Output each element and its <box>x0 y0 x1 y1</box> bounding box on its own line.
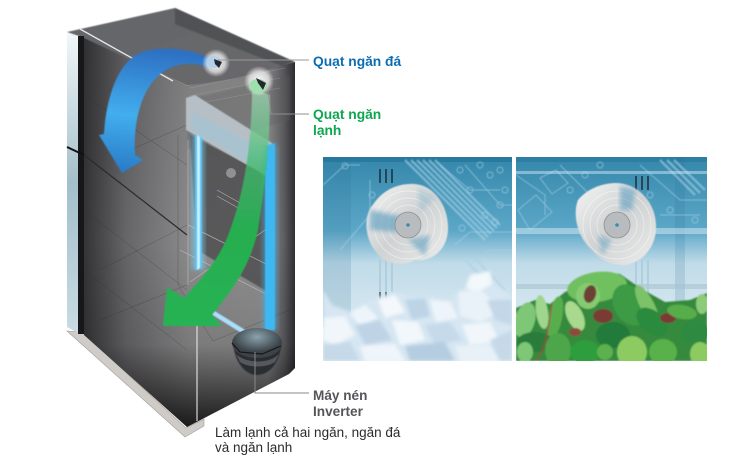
left door edge strip <box>67 33 78 333</box>
panel: fridge compartment fan <box>511 157 710 368</box>
label: inverter compressor: Máy nén <box>313 388 367 403</box>
base plinth <box>67 331 204 437</box>
label: fridge fan: Quạt ngăn <box>313 107 381 122</box>
salad leaves <box>516 270 707 361</box>
door gap and edge highlights <box>67 29 290 421</box>
leader line: ice fan <box>218 59 309 61</box>
compressor <box>232 328 282 375</box>
body <box>84 36 295 427</box>
fan <box>366 184 448 264</box>
green air arrow <box>163 88 270 326</box>
ice fan <box>202 49 230 77</box>
caption: và ngăn lạnh <box>215 440 292 455</box>
ice <box>323 271 512 361</box>
panel: ice compartment fan <box>323 157 512 361</box>
label: fridge fan: lạnh <box>313 123 341 138</box>
refrigerator <box>67 8 295 437</box>
leader line: fridge fan <box>268 90 309 114</box>
glass shelves <box>516 171 707 174</box>
wires <box>380 169 392 305</box>
fan <box>576 183 656 265</box>
cold air ducts <box>191 135 278 334</box>
label: inverter compressor: Inverter <box>313 404 364 419</box>
circuit pattern <box>516 162 707 230</box>
wires <box>636 176 648 296</box>
leader line: compressor <box>255 352 309 393</box>
inner compartment <box>180 68 290 295</box>
caption: Làm lạnh cả hai ngăn, ngăn đá <box>215 425 401 440</box>
fridge fan <box>244 66 274 96</box>
circuit pattern <box>323 162 512 265</box>
blue air arrow <box>99 49 210 173</box>
top face <box>67 8 295 86</box>
label: ice fan: Quạt ngăn đá <box>313 54 401 69</box>
